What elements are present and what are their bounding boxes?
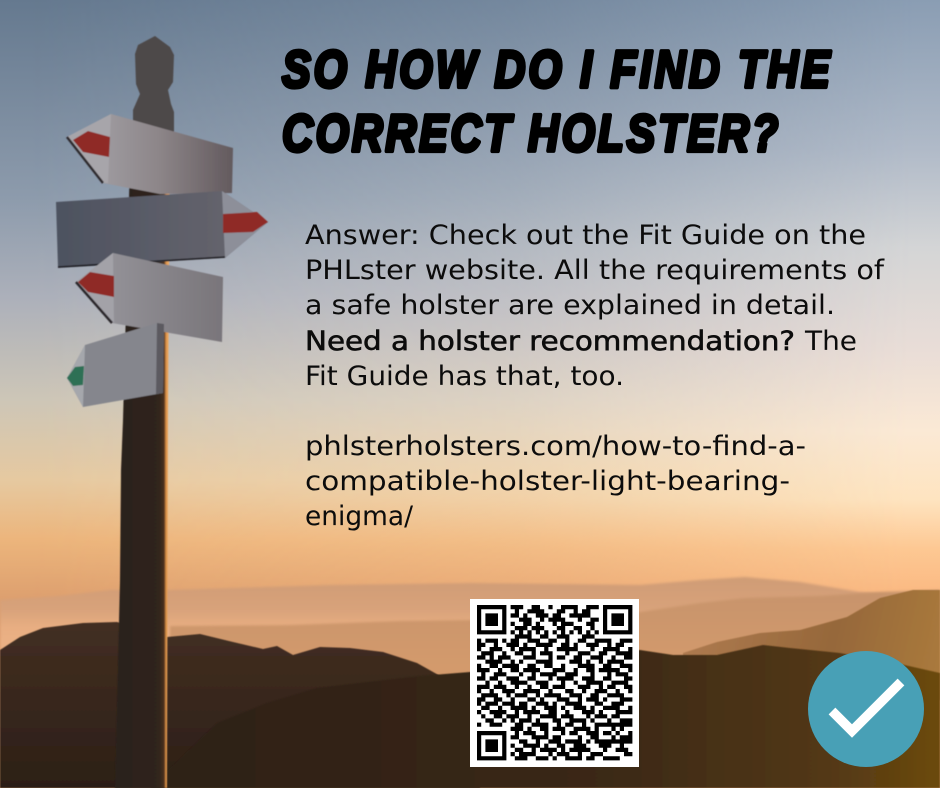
answer text block: The [804, 326, 857, 357]
link text: enigma/ [305, 501, 414, 532]
link text: phlsterholsters.com/how-to-find-a- [305, 431, 806, 462]
title: CORRECT HOLSTER? [282, 105, 778, 163]
answer text block: Need a holster recommendation? [305, 326, 795, 357]
signpost [56, 36, 268, 788]
title [282, 41, 831, 163]
background: layered mountains [0, 577, 940, 788]
link text [305, 431, 806, 532]
answer text block: PHLster website. All the requirements of [305, 255, 886, 286]
answer text block: Answer: Check out the Fit Guide on the [305, 220, 866, 251]
sign 2: right arrow with red stripe [56, 191, 268, 268]
title: SO HOW DO I FIND THE [282, 41, 831, 99]
link text: compatible-holster-light-bearing- [305, 466, 790, 497]
sign 4: left arrow with green stripe [67, 323, 164, 407]
sign 3: left arrow with red stripe [76, 253, 223, 342]
answer text block [305, 220, 886, 392]
QR code [470, 599, 639, 767]
post top finial [133, 36, 174, 135]
post shaft [115, 125, 170, 788]
icon: check mark badge [808, 651, 924, 767]
answer text block: Fit Guide has that, too. [305, 361, 624, 392]
sign 1: left arrow with red stripe [67, 114, 233, 194]
answer text block: a safe holster are explained in detail. [305, 290, 835, 321]
